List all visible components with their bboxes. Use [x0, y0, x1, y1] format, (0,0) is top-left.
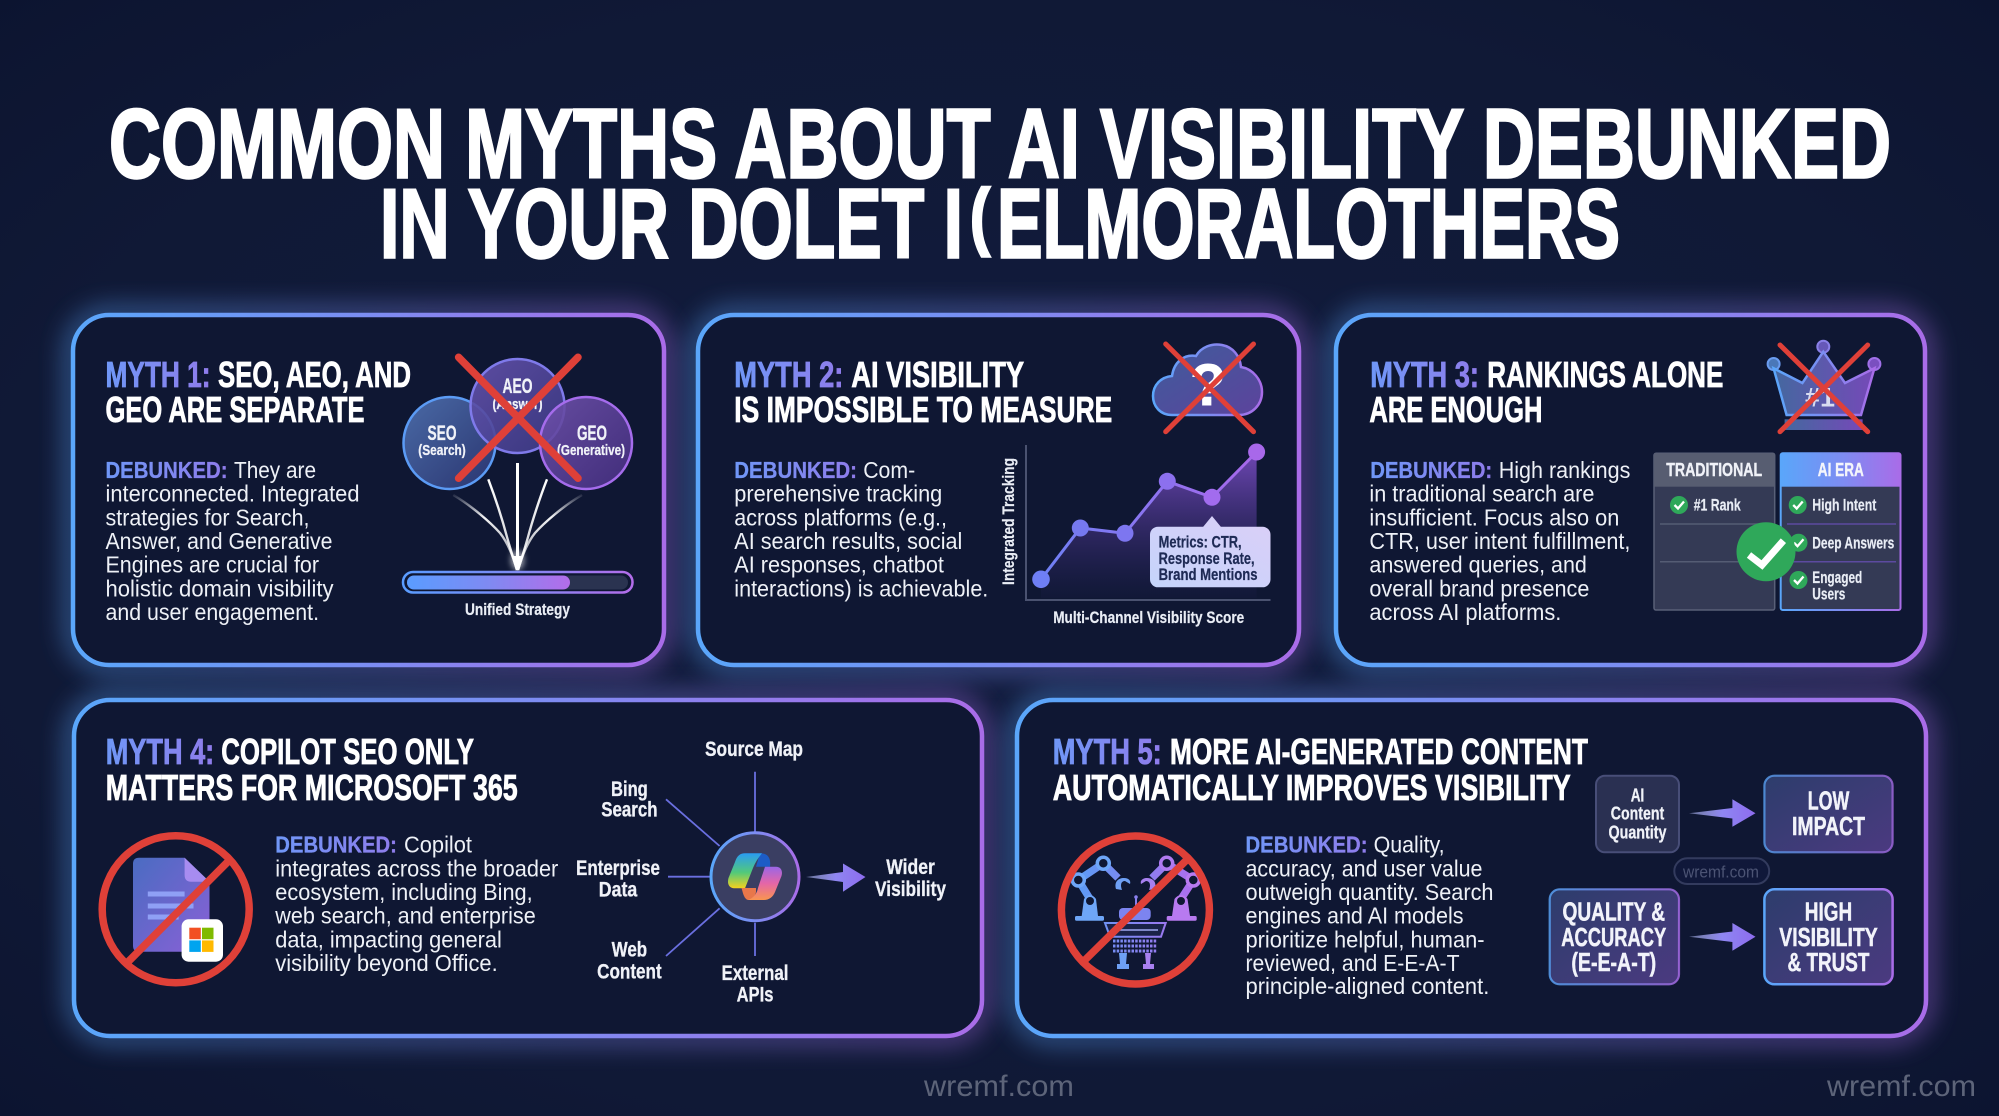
source map hub diagram: Bing	[611, 778, 648, 801]
box: quality and accuracy	[1550, 889, 1679, 984]
myth 5 debunked text: DEBUNKED:	[1246, 832, 1368, 858]
panel: myth 4	[74, 700, 982, 1036]
arrow to wider visibility	[806, 864, 866, 892]
myth 3 heading	[1369, 354, 1723, 430]
venn diagram: SEO AEO GEO crossed out: (Generative)	[557, 442, 625, 459]
myth 5 debunked text: Quality,	[1374, 832, 1445, 858]
myth 2 debunked text: AI responses, chatbot	[734, 552, 944, 578]
venn diagram: SEO AEO GEO crossed out	[404, 357, 632, 489]
myth 2 heading: MYTH 2:	[734, 354, 843, 395]
box: high visibility and trust: & TRUST	[1788, 947, 1870, 977]
myth 3 debunked text: across AI platforms.	[1369, 599, 1561, 625]
title: ELMORALOTHERS	[997, 168, 1620, 278]
myth 1 debunked text: Answer, and Generative	[106, 528, 332, 554]
source map hub diagram: Search	[601, 799, 658, 822]
myth 5 debunked text: outweigh quantity. Search	[1246, 879, 1494, 905]
myth 5 debunked text: prioritize helpful, human-	[1246, 926, 1484, 952]
myth 2 debunked text: across platforms (e.g.,	[734, 504, 947, 530]
myth 4 heading: MATTERS FOR MICROSOFT 365	[106, 767, 518, 808]
myth 2 debunked text: DEBUNKED:	[734, 457, 857, 483]
myth 3 debunked text: overall brand presence	[1369, 575, 1589, 601]
icon: crossed out crown	[1768, 341, 1880, 432]
myth 1 heading	[106, 354, 411, 430]
myth 5 heading	[1053, 731, 1588, 808]
myth 3 debunked text: DEBUNKED:	[1370, 457, 1492, 483]
venn diagram: SEO AEO GEO crossed out: (Answer)	[492, 396, 542, 413]
icon: crossed out cloud with question mark: ?	[1190, 353, 1226, 418]
myth 3 debunked text: CTR, user intent fulfillment,	[1369, 528, 1630, 554]
box: high visibility and trust	[1764, 889, 1893, 984]
myth 2 debunked text: AI search results, social	[734, 528, 962, 554]
panel: myth 1	[73, 315, 664, 665]
panel: myth 3	[1336, 315, 1925, 665]
comparison table: traditional column	[1654, 453, 1775, 610]
myth 1 heading: SEO, AEO, AND	[218, 354, 411, 395]
title: IN YOUR DOLET I	[380, 168, 963, 278]
myth 4 debunked text: visibility beyond Office.	[275, 950, 498, 976]
box: high visibility and trust: VISIBILITY	[1779, 922, 1878, 952]
callout: metrics: Brand Mentions	[1159, 566, 1258, 584]
myth 4 debunked text: web search, and enterprise	[274, 903, 536, 929]
venn diagram: SEO AEO GEO crossed out: GEO	[577, 422, 607, 445]
line chart: multi-channel visibility score	[999, 444, 1270, 627]
watermark pill	[1674, 858, 1769, 884]
comparison table: traditional column: #1 Rank	[1694, 496, 1741, 515]
source map hub diagram: Enterprise	[576, 857, 660, 880]
comparison table: AI era column: Deep Answers	[1812, 533, 1894, 552]
comparison table: traditional column: TRADITIONAL	[1666, 459, 1762, 480]
box: quality and accuracy: (E-E-A-T)	[1571, 947, 1656, 977]
unified strategy progress bar	[403, 572, 632, 619]
myth 1 debunked text: strategies for Search,	[106, 504, 310, 530]
myth 1 heading: MYTH 1:	[106, 354, 210, 395]
myth 5 debunked text: reviewed, and E-E-A-T	[1246, 950, 1460, 976]
myth 5 heading: AUTOMATICALLY IMPROVES VISIBILITY	[1053, 767, 1571, 808]
myth 4 heading: MYTH 4:	[106, 731, 214, 772]
myth 4 debunked text: ecosystem, including Bing,	[275, 879, 533, 905]
myth 5 heading: MORE AI-GENERATED CONTENT	[1170, 731, 1588, 772]
comparison table: AI era column: Engaged	[1812, 568, 1862, 587]
source map hub diagram: Visibility	[875, 878, 946, 901]
icon: prohibited document with microsoft tile	[102, 836, 249, 983]
source map hub diagram	[576, 738, 946, 1007]
box: AI content quantity: AI	[1631, 786, 1644, 806]
callout: metrics	[1150, 516, 1270, 587]
myth 1 debunked text: Engines are crucial for	[106, 552, 319, 578]
myth 3 heading: MYTH 3:	[1370, 354, 1479, 395]
source map hub diagram: APIs	[737, 984, 773, 1007]
title: (	[970, 174, 990, 257]
myth 5 debunked text	[1246, 832, 1494, 999]
icon: copilot logo	[728, 853, 782, 900]
box: quality and accuracy: QUALITY &	[1562, 897, 1665, 927]
icon: crossed out cloud with question mark	[1153, 344, 1262, 432]
myth 3 debunked text: in traditional search are	[1369, 481, 1594, 507]
myth 5 debunked text: accuracy, and user value	[1246, 855, 1482, 881]
callout: metrics: Response Rate,	[1159, 550, 1255, 568]
arrow: quality to high visibility	[1689, 923, 1756, 951]
line chart: multi-channel visibility score: Multi-Channel Visibility Score	[1053, 608, 1244, 627]
source map hub diagram: Data	[599, 879, 638, 902]
myth 4 debunked text: data, impacting general	[275, 926, 502, 952]
myth 4 debunked text: Copilot	[404, 832, 473, 858]
unified strategy progress bar: Unified Strategy	[465, 600, 570, 619]
venn diagram: SEO AEO GEO crossed out: SEO	[428, 422, 456, 445]
box: AI content quantity: Content	[1611, 803, 1664, 823]
box: high visibility and trust: HIGH	[1805, 897, 1852, 927]
myth 4 debunked text: integrates across the broader	[275, 855, 559, 881]
arrow: quantity to low impact	[1689, 799, 1756, 827]
myth 4 heading	[106, 731, 518, 808]
myth 1 heading: GEO ARE SEPARATE	[106, 389, 364, 430]
converging lines	[453, 463, 582, 571]
comparison table: AI era column: AI ERA	[1818, 459, 1864, 480]
myth 5 debunked text: principle-aligned content.	[1246, 973, 1489, 999]
comparison table: AI era column: High Intent	[1812, 496, 1877, 515]
myth 4 card frame	[74, 700, 982, 1036]
box: low impact: LOW	[1808, 785, 1850, 815]
icon: crossed out crown: #1	[1805, 383, 1835, 413]
myth 4 debunked text	[274, 832, 559, 976]
box: AI content quantity: Quantity	[1608, 822, 1666, 842]
box: quality and accuracy: ACCURACY	[1561, 922, 1666, 952]
myth 2 heading: AI VISIBILITY	[851, 354, 1024, 395]
icon: big green check	[1736, 522, 1796, 581]
venn diagram: SEO AEO GEO crossed out: (Search)	[418, 442, 466, 459]
watermark: center: wremf.com	[923, 1070, 1074, 1103]
myth 3 debunked text	[1369, 457, 1630, 625]
line chart: multi-channel visibility score: Integrated Tracking	[999, 458, 1018, 585]
myth 1 debunked text	[106, 457, 360, 625]
myth 3 card frame	[1336, 315, 1925, 665]
source map hub diagram: Content	[597, 960, 662, 983]
source map hub diagram: Web	[612, 939, 647, 962]
myth 3 debunked text: High rankings	[1499, 457, 1630, 483]
panel: myth 2	[698, 315, 1299, 665]
source map hub diagram: External	[722, 962, 788, 985]
myth 1 card frame	[73, 315, 664, 665]
myth 2 debunked text: prerehensive tracking	[734, 481, 942, 507]
watermark: right: wremf.com	[1826, 1070, 1976, 1103]
myth 1 debunked text: interconnected. Integrated	[106, 481, 360, 507]
myth 4 heading: COPILOT SEO ONLY	[221, 731, 474, 772]
source map hub diagram: Source Map	[705, 738, 803, 761]
source map hub diagram: Wider	[886, 856, 935, 879]
icon: prohibited robots	[1061, 836, 1209, 984]
myth 3 debunked text: insufficient. Focus also on	[1369, 504, 1619, 530]
myth 1 debunked text: They are	[234, 457, 316, 483]
myth 5 card frame	[1017, 700, 1926, 1036]
myth 4 debunked text: DEBUNKED:	[275, 832, 397, 858]
title	[109, 88, 1891, 278]
watermark pill: wremf.com	[1682, 862, 1759, 881]
callout: metrics: Metrics: CTR,	[1159, 533, 1242, 551]
myth 3 heading: RANKINGS ALONE	[1487, 354, 1723, 395]
myth 5 debunked text: engines and AI models	[1246, 903, 1464, 929]
box: low impact: IMPACT	[1792, 811, 1865, 841]
myth 3 heading: ARE ENOUGH	[1369, 389, 1542, 430]
myth 2 card frame	[698, 315, 1299, 665]
myth 5 heading: MYTH 5:	[1053, 731, 1162, 772]
myth 2 heading	[734, 354, 1112, 430]
box: low impact	[1764, 776, 1893, 852]
comparison table: AI era column	[1781, 453, 1900, 610]
myth 1 debunked text: and user engagement.	[106, 599, 319, 625]
myth 1 debunked text: DEBUNKED:	[106, 457, 228, 483]
venn diagram: SEO AEO GEO crossed out: AEO	[502, 375, 532, 398]
panel: myth 5	[1017, 700, 1926, 1036]
myth 2 debunked text	[734, 457, 988, 601]
box: AI content quantity	[1596, 776, 1679, 852]
myth 2 debunked text: Com-	[863, 457, 915, 483]
myth 1 debunked text: holistic domain visibility	[106, 575, 334, 601]
myth 2 debunked text: interactions) is achievable.	[734, 575, 988, 601]
myth 2 heading: IS IMPOSSIBLE TO MEASURE	[734, 389, 1112, 430]
myth 3 debunked text: answered queries, and	[1369, 552, 1587, 578]
comparison table: AI era column: Users	[1812, 584, 1845, 603]
